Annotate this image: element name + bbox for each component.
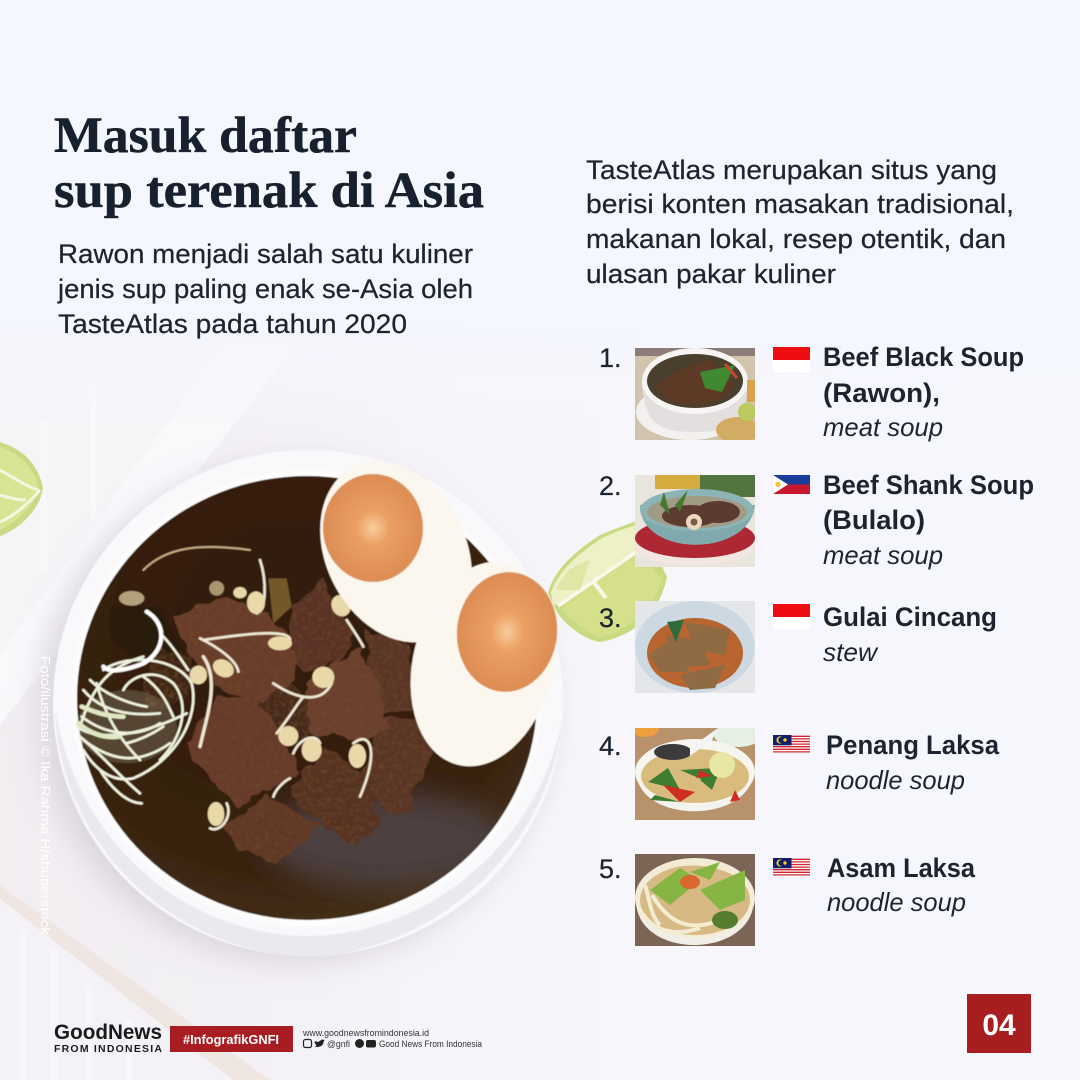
thumbnail: penang laksa [635,728,755,820]
lime wedge left [0,442,43,536]
title: sup terenak di Asia [54,163,484,219]
subtitle text: jenis sup paling enak se-Asia oleh [57,274,473,304]
rank item 1: meat soup [823,412,943,442]
rank item 2: Beef Shank Soup [823,470,1034,500]
salted egg halves [291,436,576,782]
description text [586,155,1014,289]
rank item 3: stew [823,637,879,667]
photo credit: Foto/ilustrasi © Ika Rahma H/shutterstock [38,656,53,936]
flag: Philippines [773,475,810,494]
page number badge: 04 [982,1009,1016,1042]
rank item 2: (Bulalo) [823,505,925,535]
flag: Indonesia [773,347,810,372]
flag: Malaysia [773,735,810,753]
rank item 4: 4. [599,731,622,761]
rank item 2: 2. [599,471,622,501]
rank item 1 [599,342,1024,443]
page number badge [967,994,1031,1053]
hashtag badge [170,1026,293,1052]
rank item 3: Gulai Cincang [823,602,997,632]
rank item 4: Penang Laksa [826,730,1000,760]
rank item 2: meat soup [823,540,943,570]
subtitle text [57,239,473,339]
hero photo: rawon bowl [53,436,576,956]
title [54,108,484,219]
description text: TasteAtlas merupakan situs yang [586,155,997,185]
social links [302,1028,483,1050]
description text: makanan lokal, resep otentik, dan [586,224,1006,254]
rank item 5 [599,853,976,946]
logo: GoodNews from Indonesia: GoodNews [54,1021,162,1044]
thumbnail: rawon [635,348,760,443]
rank item 1: Beef Black Soup [823,342,1024,372]
title: Masuk daftar [54,108,357,164]
social links: Good News From Indonesia [379,1039,483,1050]
rank item 1: 1. [599,343,622,373]
rank item 4 [599,719,1000,820]
social links: www.goodnewsfromindonesia.id [302,1028,429,1039]
rank item 3: 3. [599,603,622,633]
lime wedge right [548,520,667,642]
flag: Indonesia [773,604,810,629]
logo: GoodNews from Indonesia: FROM INDONESIA [54,1043,162,1055]
rank item 2 [599,470,1034,570]
beef chunks and garnish [77,547,433,863]
leek swirl [77,612,193,803]
hashtag badge: #InfografikGNFI [183,1033,279,1047]
rank item 5: Asam Laksa [827,853,976,883]
subtitle text: TasteAtlas pada tahun 2020 [58,309,407,339]
bowl [53,450,563,956]
rank item 3 [599,601,997,693]
thumbnail: bulalo [630,475,755,567]
logo: GoodNews from Indonesia [54,1021,162,1055]
description text: berisi konten masakan tradisional, [586,189,1014,219]
thumbnail: gulai cincang [635,601,755,693]
social links: @gnfi [327,1039,350,1050]
rank item 5: 5. [599,854,622,884]
description text: ulasan pakar kuliner [586,259,836,289]
thumbnail: asam laksa [635,854,755,946]
rank item 5: noodle soup [827,887,966,917]
subtitle text: Rawon menjadi salah satu kuliner [58,239,473,269]
rank item 1: (Rawon), [823,378,940,408]
bean sprouts [143,547,371,829]
rank item 4: noodle soup [826,765,965,795]
flag: Malaysia [773,858,810,876]
